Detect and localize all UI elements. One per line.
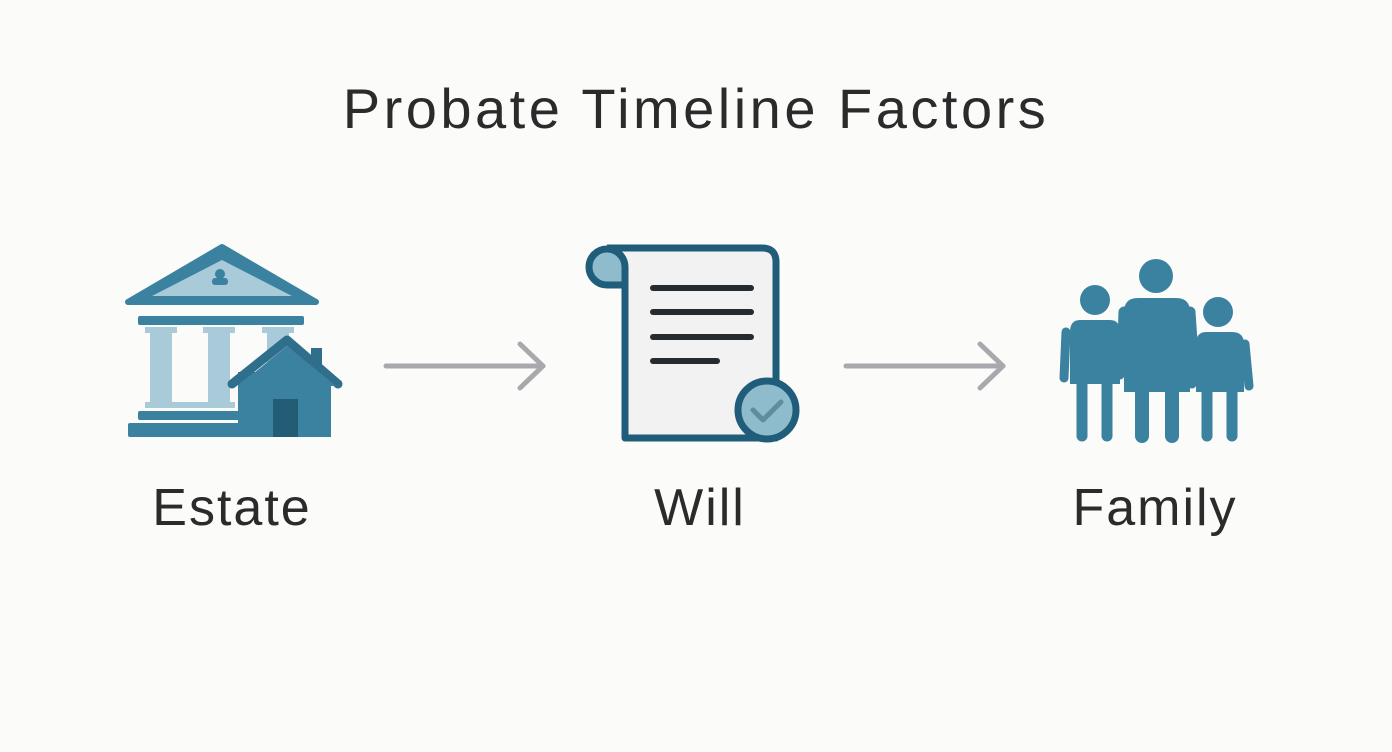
label: Family: Family [1072, 479, 1238, 537]
title: Probate Timeline Factors [343, 77, 1049, 140]
icon: family [1064, 259, 1249, 436]
icon: estate [128, 247, 338, 437]
label: Estate: Estate [152, 479, 312, 537]
label: Will: Will [654, 479, 746, 537]
icon: will [589, 248, 796, 439]
arrow 1 [386, 344, 543, 388]
arrow 2 [846, 344, 1003, 388]
